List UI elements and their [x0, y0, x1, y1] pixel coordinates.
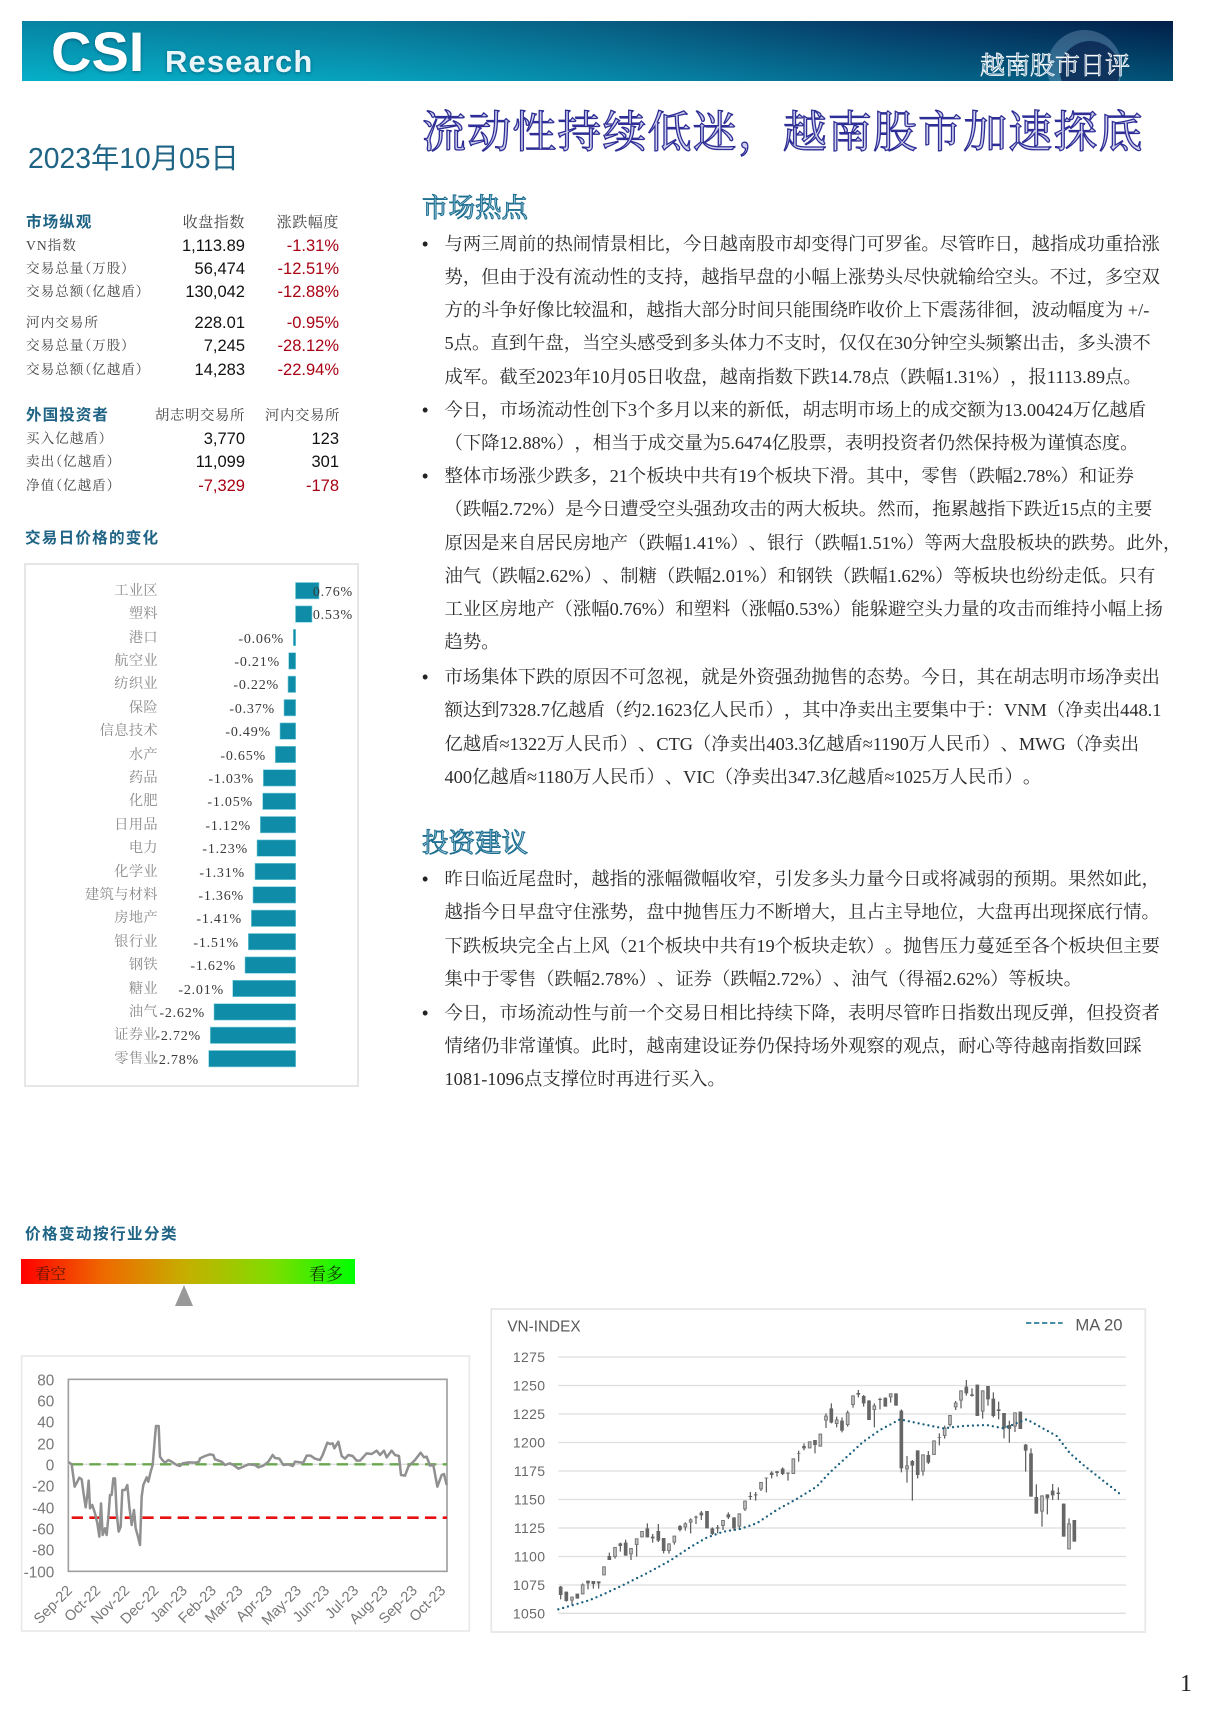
value labels: -0.65% — [220, 749, 266, 764]
row: Hanoi volume: 交易总量（万股） — [26, 338, 129, 353]
row: Hanoi value: -22.94% — [278, 361, 339, 379]
heading: market hot spots: 市场热点 — [422, 186, 528, 225]
row: Hanoi volume: -28.12% — [278, 337, 339, 355]
y axis labels: -20 — [32, 1478, 54, 1495]
value labels: 0.76% — [313, 585, 353, 600]
value labels: -1.12% — [205, 819, 251, 834]
y axis labels: -60 — [32, 1521, 54, 1538]
heading: price move by sector: 价格变动按行业分类 — [25, 1226, 178, 1242]
value labels: -2.78% — [153, 1053, 199, 1068]
y axis labels: 1150 — [514, 1491, 545, 1507]
bullet: • — [422, 667, 428, 687]
bar chart: sector price change — [24, 563, 359, 1087]
row: Hanoi volume: 7,245 — [204, 337, 245, 355]
sector labels — [85, 580, 158, 1068]
sector labels: 保险 — [129, 697, 158, 717]
row: VN index: 1,113.89 — [182, 237, 245, 255]
value labels: -1.23% — [202, 842, 248, 857]
paragraph: advice two — [444, 1002, 1160, 1089]
x axis labels: Dec-22 — [118, 1583, 162, 1628]
sector labels: 证券业 — [114, 1024, 158, 1044]
paragraph: liquidity: 今日，市场流动性创下3个多月以来的新低，胡志明市场上的成交额为13.00424万亿越盾 — [444, 400, 1146, 420]
y axis labels: 1200 — [513, 1434, 545, 1450]
x axis labels: Jul-23 — [323, 1583, 362, 1622]
header banner — [22, 21, 1173, 81]
paragraph: advice two: 情绪仍非常谨慎。此时，越南建设证券仍保持场外观察的观点，耐心等待越南指数回踩 — [444, 1036, 1142, 1056]
table: foreign investors — [26, 406, 340, 495]
paragraph: market review: 方的斗争好像比较温和，越指大部分时间只能围绕昨收价上下震荡徘徊，波动幅度为 +/- — [444, 300, 1149, 320]
value labels: -2.72% — [155, 1029, 201, 1044]
row: net — [26, 477, 339, 495]
paragraph: market review: 成军。截至2023年10月05日收盘，越南指数下跌14.78点（跌幅1.31%），报1113.89点。 — [444, 367, 1142, 387]
row: sell — [26, 453, 339, 471]
row: volume: 56,474 — [195, 260, 245, 278]
value labels: -1.51% — [193, 936, 239, 951]
paragraph: advice one: 集中于零售（跌幅2.78%）、证券（跌幅2.72%）、油气（得福2.62%）等板块。 — [444, 969, 1082, 989]
label: bullish: 看多 — [309, 1260, 343, 1285]
row: value — [26, 283, 339, 301]
sector labels: 工业区 — [114, 580, 158, 600]
paragraph: advice two: 1081-1096点支撑位时再进行买入。 — [444, 1069, 726, 1089]
sector labels: 糖业 — [129, 978, 158, 998]
row: Hanoi exchange: -0.95% — [287, 314, 339, 332]
sector labels: 港口 — [129, 627, 158, 647]
sector labels: 房地产 — [114, 907, 158, 927]
logo: Research: Research — [165, 44, 313, 79]
value labels: -1.36% — [198, 889, 244, 904]
paragraph: market review: 5点。直到午盘，当空头感受到多头体力不支时，仅仅在30分钟空头频繁出击，多头溃不 — [444, 333, 1151, 353]
paragraph: market review — [444, 234, 1160, 387]
paragraph: foreign selling: 额达到7328.7亿越盾（约2.1623亿人民币），其中净卖出主要集中于：VNM（净卖出448.1 — [444, 700, 1161, 720]
value labels: -1.41% — [196, 912, 242, 927]
x axis labels: Jun-23 — [290, 1583, 333, 1626]
paragraph: liquidity — [444, 400, 1146, 453]
x axis labels: Sep-22 — [31, 1583, 76, 1628]
y axis labels — [24, 1372, 54, 1581]
paragraph: sectors: 趋势。 — [444, 632, 500, 652]
row: sell: 卖出（亿越盾） — [26, 454, 115, 469]
chart title: VN-INDEX — [507, 1319, 581, 1336]
y axis labels: 1175 — [514, 1463, 545, 1479]
sector labels: 化学业 — [114, 861, 158, 881]
bullet: • — [422, 466, 428, 486]
row: value: -12.88% — [278, 283, 339, 301]
y axis labels: 60 — [37, 1393, 54, 1410]
paragraph: liquidity: （下降12.88%），相当于成交量为5.6474亿股票，表明投资者仍然保持极为谨慎态度。 — [444, 433, 1138, 453]
row: VN index — [26, 237, 339, 255]
main title: 流动性持续低迷，越南股市加速探底 — [422, 96, 1144, 160]
sector labels: 塑料 — [129, 603, 158, 623]
bullet: • — [422, 1002, 428, 1022]
paragraph: sectors: 油气（跌幅2.62%）、制糖（跌幅2.01%）和钢铁（跌幅1.62%）等板块也纷纷走低。只有 — [444, 566, 1155, 586]
table header row: 收盘指数 — [183, 215, 245, 231]
value labels: 0.53% — [313, 608, 353, 623]
paragraph: market review: 势，但由于没有流动性的支持，越指早盘的小幅上涨势头尽快就输给空头。不过，多空双 — [444, 267, 1160, 287]
sector labels: 零售业 — [114, 1048, 158, 1068]
value labels: -1.62% — [190, 959, 236, 974]
sector labels: 航空业 — [114, 650, 158, 670]
row: volume: -12.51% — [278, 260, 339, 278]
sentiment gauge bar — [21, 1259, 355, 1284]
paragraph: sectors — [444, 466, 1181, 652]
x axis labels: Nov-22 — [88, 1583, 133, 1628]
paragraph: sectors: 原因是来自居民房地产（跌幅1.41%）、银行（跌幅1.51%）等两大盘股板块的跌势。此外， — [444, 533, 1181, 553]
row: Hanoi exchange — [26, 314, 339, 332]
y axis labels: 1100 — [514, 1548, 545, 1564]
table header row: 胡志明交易所 — [155, 408, 245, 424]
icon: gauge pointer triangle — [175, 1285, 193, 1306]
table: market overview — [26, 214, 339, 379]
bullet: • — [422, 234, 428, 254]
sector labels: 钢铁 — [129, 954, 158, 974]
bullet: • — [422, 869, 428, 889]
page number: 1 — [1180, 1671, 1192, 1697]
paragraph: foreign selling: 市场集体下跌的原因不可忽视，就是外资强劲抛售的态势。今日，其在胡志明市场净卖出 — [444, 667, 1160, 687]
y axis labels — [513, 1349, 545, 1621]
paragraph: advice one: 越指今日早盘守住涨势，盘中抛售压力不断增大，且占主导地位，大盘再出现探底行情。 — [444, 902, 1160, 922]
paragraph: sectors: 整体市场涨少跌多，21个板块中共有19个板块下滑。其中，零售（跌幅2.78%）和证券 — [444, 466, 1134, 486]
table header row — [26, 406, 340, 424]
paragraph: advice two: 今日，市场流动性与前一个交易日相比持续下降，表明尽管昨日指数出现反弹，但投资者 — [444, 1002, 1160, 1022]
row: buy — [26, 430, 339, 448]
label: bearish: 看空 — [35, 1262, 66, 1284]
candlestick chart: VN-INDEX — [490, 1308, 1146, 1633]
row: net: 净值（亿越盾） — [26, 478, 115, 493]
value labels: -1.05% — [207, 795, 253, 810]
x axis labels — [31, 1583, 449, 1629]
hollow candle bodies — [572, 1390, 1069, 1601]
value labels — [153, 585, 353, 1068]
paragraph: advice one: 下跌板块完全占上风（21个板块中共有19个板块走软）。抛售压力蔓延至各个板块但主要 — [444, 936, 1160, 956]
row: net: -178 — [306, 477, 339, 495]
x axis labels: Mar-23 — [202, 1583, 246, 1627]
y axis labels: 1275 — [513, 1349, 545, 1365]
row: Hanoi exchange: 228.01 — [195, 314, 245, 332]
sector labels: 水产 — [129, 744, 158, 764]
line chart: sentiment index — [21, 1355, 470, 1632]
date: 2023年10月05日 — [28, 142, 239, 174]
legend: MA 20: MA 20 — [1075, 1315, 1123, 1334]
row: value: 130,042 — [185, 283, 245, 301]
value labels: -0.37% — [229, 702, 275, 717]
sector labels: 建筑与材料 — [85, 884, 158, 904]
x axis labels: Apr-23 — [233, 1583, 276, 1625]
y axis labels: 1050 — [513, 1605, 545, 1621]
sector labels: 纺织业 — [114, 673, 158, 693]
candle wicks — [561, 1380, 1074, 1605]
bullet: • — [422, 400, 428, 420]
paragraph: foreign selling: 亿越盾≈1322万人民币）、CTG（净卖出403.3亿越盾≈1190万人民币）、MWG（净卖出 — [444, 734, 1139, 754]
x axis labels: May-23 — [259, 1583, 305, 1629]
y axis labels: 1225 — [513, 1406, 545, 1422]
value labels: -2.62% — [159, 1006, 205, 1021]
row: Hanoi value: 14,283 — [195, 361, 245, 379]
x axis labels: Jan-23 — [148, 1583, 191, 1626]
row: buy: 3,770 — [204, 430, 245, 448]
row: sell: 301 — [311, 453, 339, 471]
value labels: -0.21% — [234, 655, 280, 670]
heading: investment advice: 投资建议 — [422, 820, 528, 860]
heading: daily price change: 交易日价格的变化 — [25, 530, 159, 547]
table header row: 河内交易所 — [265, 408, 340, 424]
x axis labels: Sep-23 — [376, 1583, 421, 1628]
table header row — [26, 214, 339, 231]
value labels: -0.49% — [225, 725, 271, 740]
table header row: 市场纵观 — [26, 214, 92, 231]
row: net: -7,329 — [198, 477, 245, 495]
row: Hanoi exchange: 河内交易所 — [26, 315, 99, 330]
value labels: -0.22% — [233, 678, 279, 693]
y axis labels: -100 — [24, 1564, 54, 1581]
y axis labels: 1125 — [514, 1520, 545, 1536]
y axis labels: 40 — [37, 1414, 54, 1431]
paragraph: market review: 与两三周前的热闹情景相比，今日越南股市却变得门可罗雀。尽管昨日，越指成功重拾涨 — [444, 234, 1160, 254]
paragraph: foreign selling — [444, 667, 1161, 787]
value labels: -1.03% — [208, 772, 254, 787]
sector labels: 银行业 — [114, 931, 158, 951]
moving average line — [558, 1419, 1120, 1609]
paragraph: sectors: 工业区房地产（涨幅0.76%）和塑料（涨幅0.53%）能躲避空头力量的攻击而维持小幅上扬 — [444, 599, 1163, 619]
y axis labels: 1250 — [513, 1378, 545, 1394]
row: volume — [26, 260, 339, 278]
table header row: 涨跌幅度 — [277, 215, 339, 231]
paragraph: advice one: 昨日临近尾盘时，越指的涨幅微幅收窄，引发多头力量今日或将减弱的预期。果然如此， — [444, 869, 1160, 889]
row: VN index: VN指数 — [26, 238, 77, 253]
row: Hanoi volume — [26, 337, 339, 355]
value labels: -1.31% — [199, 866, 245, 881]
y axis labels: -80 — [32, 1542, 54, 1559]
sector labels: 油气 — [129, 1001, 158, 1021]
x axis labels: Feb-23 — [176, 1583, 220, 1627]
sector labels: 日用品 — [114, 814, 158, 834]
value labels: -2.01% — [178, 983, 224, 998]
table header row: 外国投资者 — [26, 407, 109, 424]
paragraph: sectors: （跌幅2.72%）是今日遭受空头强劲攻击的两大板块。然而，拖累越指下跌近15点的主要 — [444, 499, 1152, 519]
row: Hanoi value: 交易总额（亿越盾） — [26, 362, 144, 377]
sector labels: 信息技术 — [100, 720, 158, 740]
row: volume: 交易总量（万股） — [26, 261, 129, 276]
row: VN index: -1.31% — [287, 237, 339, 255]
x axis labels: Oct-22 — [62, 1583, 104, 1625]
x axis labels: Aug-23 — [347, 1583, 391, 1628]
row: sell: 11,099 — [196, 453, 245, 471]
sector labels: 电力 — [129, 837, 158, 857]
header label: 越南股市日评 — [980, 46, 1130, 81]
paragraph: advice one — [444, 869, 1160, 989]
value labels: -0.06% — [238, 632, 284, 647]
paragraph: foreign selling: 400亿越盾≈1180万人民币）、VIC（净卖出347.3亿越盾≈1025万人民币）。 — [444, 767, 1041, 787]
y axis labels: 0 — [46, 1457, 54, 1474]
y axis labels: 20 — [37, 1436, 54, 1453]
y axis labels: 1075 — [513, 1577, 545, 1593]
sector labels: 化肥 — [129, 790, 158, 810]
legend: MA 20 — [1026, 1315, 1123, 1334]
row: value: 交易总额（亿越盾） — [26, 284, 144, 299]
row: Hanoi value — [26, 361, 339, 379]
icon: globe emblem — [1047, 30, 1122, 105]
x axis labels: Oct-23 — [407, 1583, 449, 1625]
y axis labels: -40 — [32, 1500, 54, 1517]
row: buy: 123 — [311, 430, 339, 448]
sector labels: 药品 — [129, 767, 158, 787]
dark candle bodies — [561, 1385, 1074, 1601]
row: buy: 买入亿越盾） — [26, 431, 107, 446]
y axis labels: 80 — [37, 1372, 54, 1389]
